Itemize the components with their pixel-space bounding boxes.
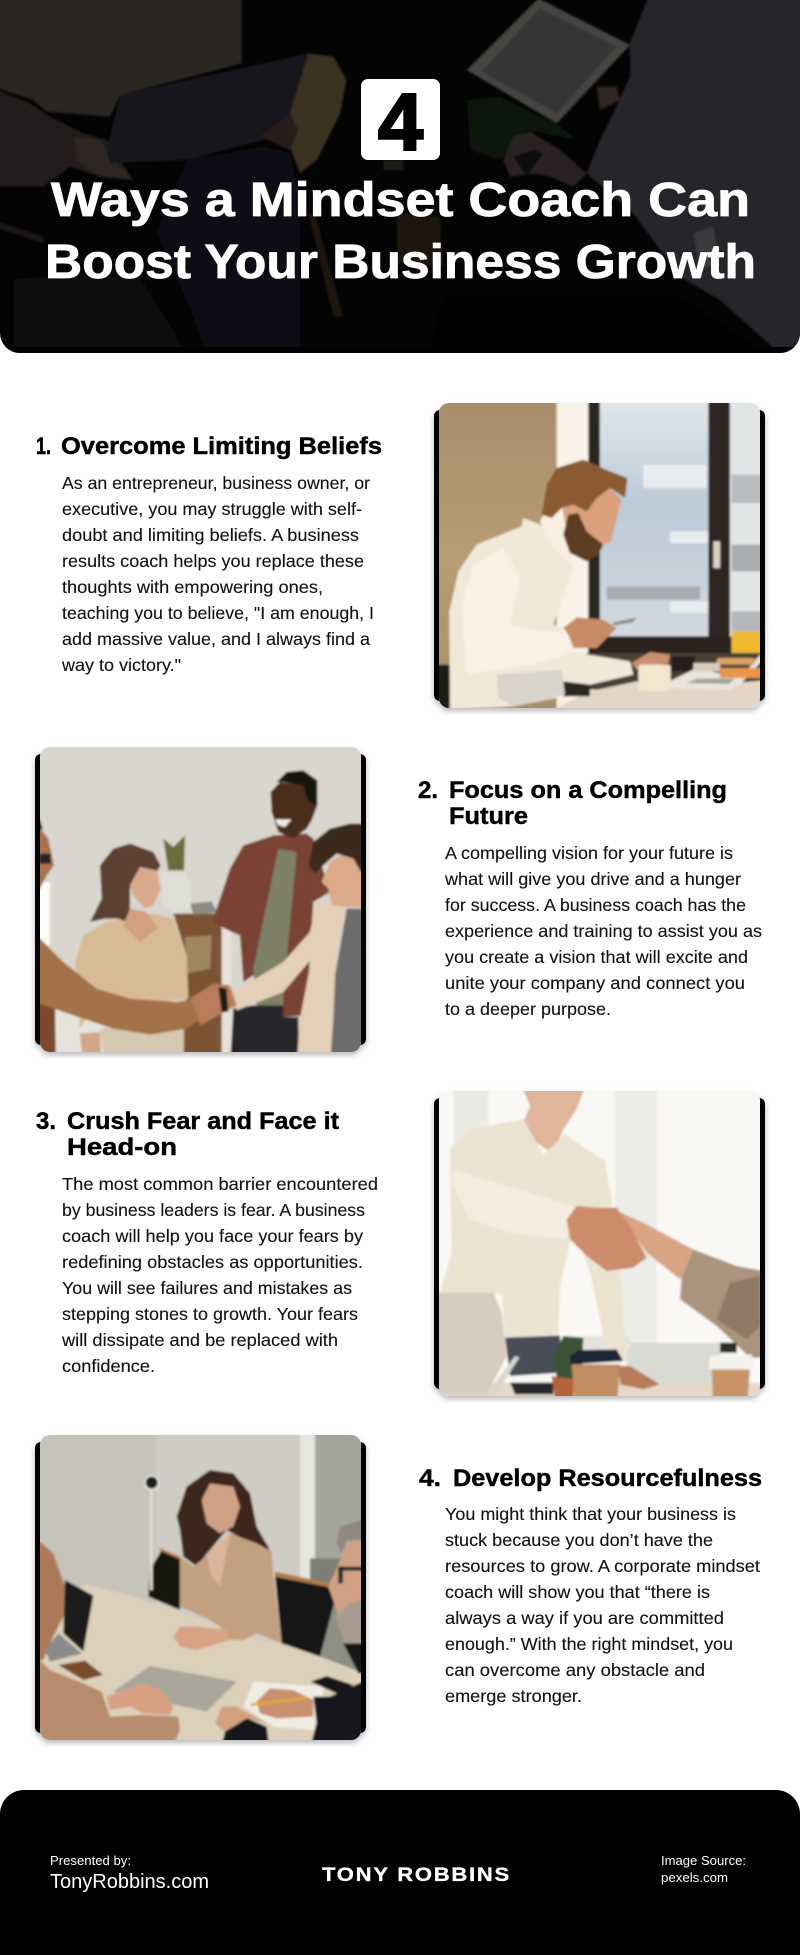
step 2 body [444,843,762,1019]
step 4 heading: Develop Resourcefulness [453,1465,762,1492]
photo: meeting at table [27,1427,375,1753]
step 4 body: emerge stronger. [445,1686,582,1706]
step 1 body [61,473,374,675]
step 1 body: executive, you may struggle with self- [62,499,362,519]
step 3 body: by business leaders is fear. A business [62,1200,365,1220]
presented by credit: Presented by: [50,1853,131,1868]
step 3 heading: Crush Fear and Face it [67,1108,339,1135]
step 3 body: confidence. [62,1356,155,1376]
step 4 body: can overcome any obstacle and [445,1660,705,1680]
step 1 body: results coach helps you replace these [62,551,364,571]
step 4 body: resources to grow. A corporate mindset [445,1556,760,1576]
step 2 body: experience and training to assist you as [445,921,762,941]
step 1 body: doubt and limiting beliefs. A business [62,525,359,545]
step 2 body: unite your company and connect you [445,973,745,993]
photo: team handshake [27,739,373,1065]
step 2 body: what will give you drive and a hunger [444,869,741,889]
panel: step 3 text [36,1108,378,1376]
image source credit: pexels.com [661,1870,728,1885]
presented by credit [50,1853,209,1893]
step 3 body [61,1174,378,1376]
title: Boost Your Business Growth [45,236,756,289]
step 4 heading: 4. [419,1465,441,1492]
step 4 body: stuck because you don’t have the [445,1530,713,1550]
step 1 body: As an entrepreneur, business owner, or [62,473,370,493]
step 2 body: to a deeper purpose. [445,999,611,1019]
step 3 body: coach will help you face your fears by [62,1226,363,1246]
presented by credit: TonyRobbins.com [50,1871,209,1893]
number badge [361,78,440,168]
step 2 heading: Future [449,803,528,830]
step 4 body: enough.” With the right mindset, you [445,1634,733,1654]
number badge: 4 [378,78,423,168]
image source credit: Image Source: [661,1853,746,1868]
step 1 body: teaching you to believe, "I am enough, I [62,603,374,623]
panel: step 1 text [36,433,382,675]
step 2 heading: 2. [418,777,438,804]
photo: handshake over desk [427,1083,773,1409]
step 1 body: way to victory." [61,655,181,675]
step 3 body: stepping stones to growth. Your fears [62,1304,358,1324]
step 3 body: redefining obstacles as opportunities. [62,1252,363,1272]
step 1 heading: 1. [36,433,51,460]
step 4 body: coach will show you that “there is [445,1582,710,1602]
step 3 body: will dissipate and be replaced with [61,1330,338,1350]
step 4 body [445,1504,760,1706]
step 4 body: You might think that your business is [445,1504,736,1524]
step 3 heading: 3. [36,1108,56,1135]
step 3 heading [36,1108,339,1161]
step 3 body: The most common barrier encountered [62,1174,378,1194]
step 2 heading [418,777,727,830]
panel: header [0,0,800,353]
title [45,174,756,289]
step 2 body: for success. A business coach has the [445,895,746,915]
step 2 body: you create a vision that will excite and [445,947,748,967]
step 2 body: A compelling vision for your future is [445,843,733,863]
logo wordmark: TONY ROBBINS [322,1865,511,1886]
step 1 body: add massive value, and I always find a [62,629,370,649]
title: Ways a Mindset Coach Can [51,174,750,227]
step 3 heading: Head-on [67,1134,177,1161]
panel: footer [0,1790,800,1955]
panel: step 2 text [418,777,762,1019]
header background photo [0,0,800,353]
step 3 body: You will see failures and mistakes as [62,1278,352,1298]
step 1 body: thoughts with empowering ones, [62,577,323,597]
photo: man at desk with phone [427,395,773,721]
panel: step 4 text [419,1465,762,1706]
step 2 heading: Focus on a Compelling [449,777,727,804]
step 1 heading: Overcome Limiting Beliefs [61,433,382,460]
step 4 body: always a way if you are committed [445,1608,724,1628]
image source credit [661,1853,746,1885]
